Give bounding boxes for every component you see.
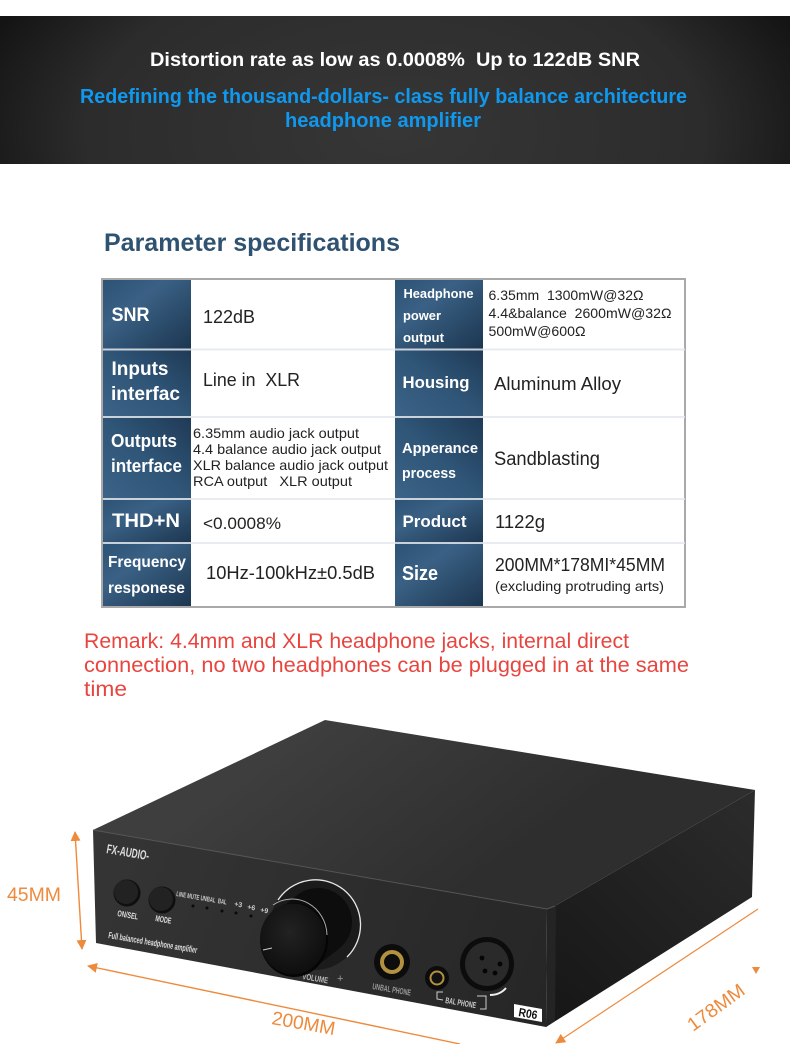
row: frequency response and size: (excluding protruding arts): [495, 578, 664, 594]
row: outputs interface and appearance process: Apperance: [402, 440, 478, 457]
dimension: depth 178MM: [556, 909, 760, 1043]
power button: [114, 880, 140, 922]
row: SNR and headphone power output: [103, 280, 672, 349]
product illustration: headphone amplifier: [93, 720, 755, 1027]
row: SNR and headphone power output: output: [403, 330, 445, 345]
row: inputs interface and housing: Line in XLR: [203, 370, 300, 390]
balanced phone label: BAL PHONE: [445, 995, 477, 1010]
volume label: VOLUME: [302, 971, 329, 985]
row: inputs interface and housing: [103, 349, 621, 417]
row: inputs interface and housing: interfac: [111, 384, 180, 405]
remark: time: [84, 678, 127, 701]
row: outputs interface and appearance process: process: [402, 465, 456, 482]
power button: ON/SEL: [117, 908, 139, 922]
row: SNR and headphone power output: Headphone: [404, 286, 474, 301]
balanced XLR jack: [460, 937, 514, 995]
indicator labels: +6: [247, 904, 256, 912]
row: SNR and headphone power output: power: [403, 308, 441, 323]
row: frequency response and size: [103, 543, 665, 606]
dimension: height 45MM: [7, 832, 82, 949]
unbalanced headphone jack: [372, 944, 412, 998]
model badge: R06: [517, 1005, 539, 1022]
heading: parameter specifications: Parameter specifications: [104, 229, 400, 257]
tagline: Full balanced headphone amplifier: [108, 930, 198, 955]
row: outputs interface and appearance process: interface: [111, 456, 182, 476]
chassis right side: [546, 790, 755, 1027]
row: outputs interface and appearance process: Sandblasting: [494, 449, 600, 470]
dimension: width 200MM: 200MM: [270, 1008, 337, 1040]
row: THD+N and product weight: 1122g: [495, 512, 545, 532]
dimension: width 200MM: [88, 966, 460, 1044]
balanced phone label: [437, 992, 486, 1010]
indicator labels: +9: [260, 907, 269, 915]
row: frequency response and size: 10Hz-100kHz±0.5dB: [206, 563, 375, 583]
volume knob: [260, 880, 361, 977]
brand logo: FX-AUDIO-: [105, 841, 150, 863]
row: inputs interface and housing: Housing: [402, 373, 470, 392]
row: THD+N and product weight: THD+N: [112, 511, 180, 532]
row: inputs interface and housing: Aluminum Alloy: [494, 374, 621, 394]
unbalanced headphone jack: UNBAL PHONE: [372, 981, 412, 998]
row: outputs interface and appearance process: 4.4 balance audio jack output: [193, 441, 381, 457]
indicator labels: [176, 891, 269, 918]
row: SNR and headphone power output: 4.4&balance 2600mW@32Ω: [488, 305, 672, 321]
remark: connection, no two headphones can be plugged in at the same: [84, 654, 689, 677]
header banner: [0, 16, 790, 164]
subheading: [80, 86, 687, 132]
row: frequency response and size: Frequency: [108, 554, 186, 571]
row: outputs interface and appearance process: XLR balance audio jack output: [193, 457, 388, 473]
row: frequency response and size: 200MM*178MI*45MM: [495, 555, 665, 575]
row: THD+N and product weight: <0.0008%: [203, 514, 281, 533]
row: THD+N and product weight: [103, 499, 545, 543]
row: frequency response and size: responese: [108, 580, 185, 597]
volume label: +: [337, 973, 343, 985]
dimension: height 45MM: 45MM: [7, 885, 61, 906]
subheading: Redefining the thousand-dollars- class fully balance architecture: [80, 86, 687, 108]
indicator labels: LINE MUTE UNBAL BAL: [176, 891, 228, 907]
row: frequency response and size: Size: [402, 563, 438, 585]
row: outputs interface and appearance process: 6.35mm audio jack output: [193, 425, 359, 441]
balanced 4.4 jack: [425, 966, 449, 990]
remark: [84, 630, 689, 701]
dimension: depth 178MM: 178MM: [684, 980, 749, 1036]
row: THD+N and product weight: Product: [402, 512, 467, 531]
row: SNR and headphone power output: 6.35mm 1300mW@32Ω: [488, 287, 644, 303]
chassis corner strip: [546, 905, 556, 1027]
headline: Distortion rate as low as 0.0008% Up to 122dB SNR: [150, 50, 640, 71]
row: SNR and headphone power output: SNR: [112, 305, 150, 326]
row: outputs interface and appearance process: Outputs: [111, 431, 177, 451]
row: outputs interface and appearance process: RCA output XLR output: [193, 473, 352, 489]
subheading: headphone amplifier: [285, 110, 481, 132]
indicator labels: +3: [234, 901, 243, 909]
chassis top: [93, 720, 755, 910]
remark: Remark: 4.4mm and XLR headphone jacks, internal direct: [84, 630, 629, 653]
mode button: MODE: [155, 913, 172, 926]
row: inputs interface and housing: Inputs: [112, 359, 168, 380]
specification table: [102, 279, 685, 607]
row: SNR and headphone power output: 500mW@600Ω: [488, 323, 586, 339]
chassis front panel: [93, 830, 547, 1027]
row: outputs interface and appearance process: [103, 417, 600, 499]
row: SNR and headphone power output: 122dB: [203, 307, 255, 327]
mode button: [148, 886, 176, 926]
